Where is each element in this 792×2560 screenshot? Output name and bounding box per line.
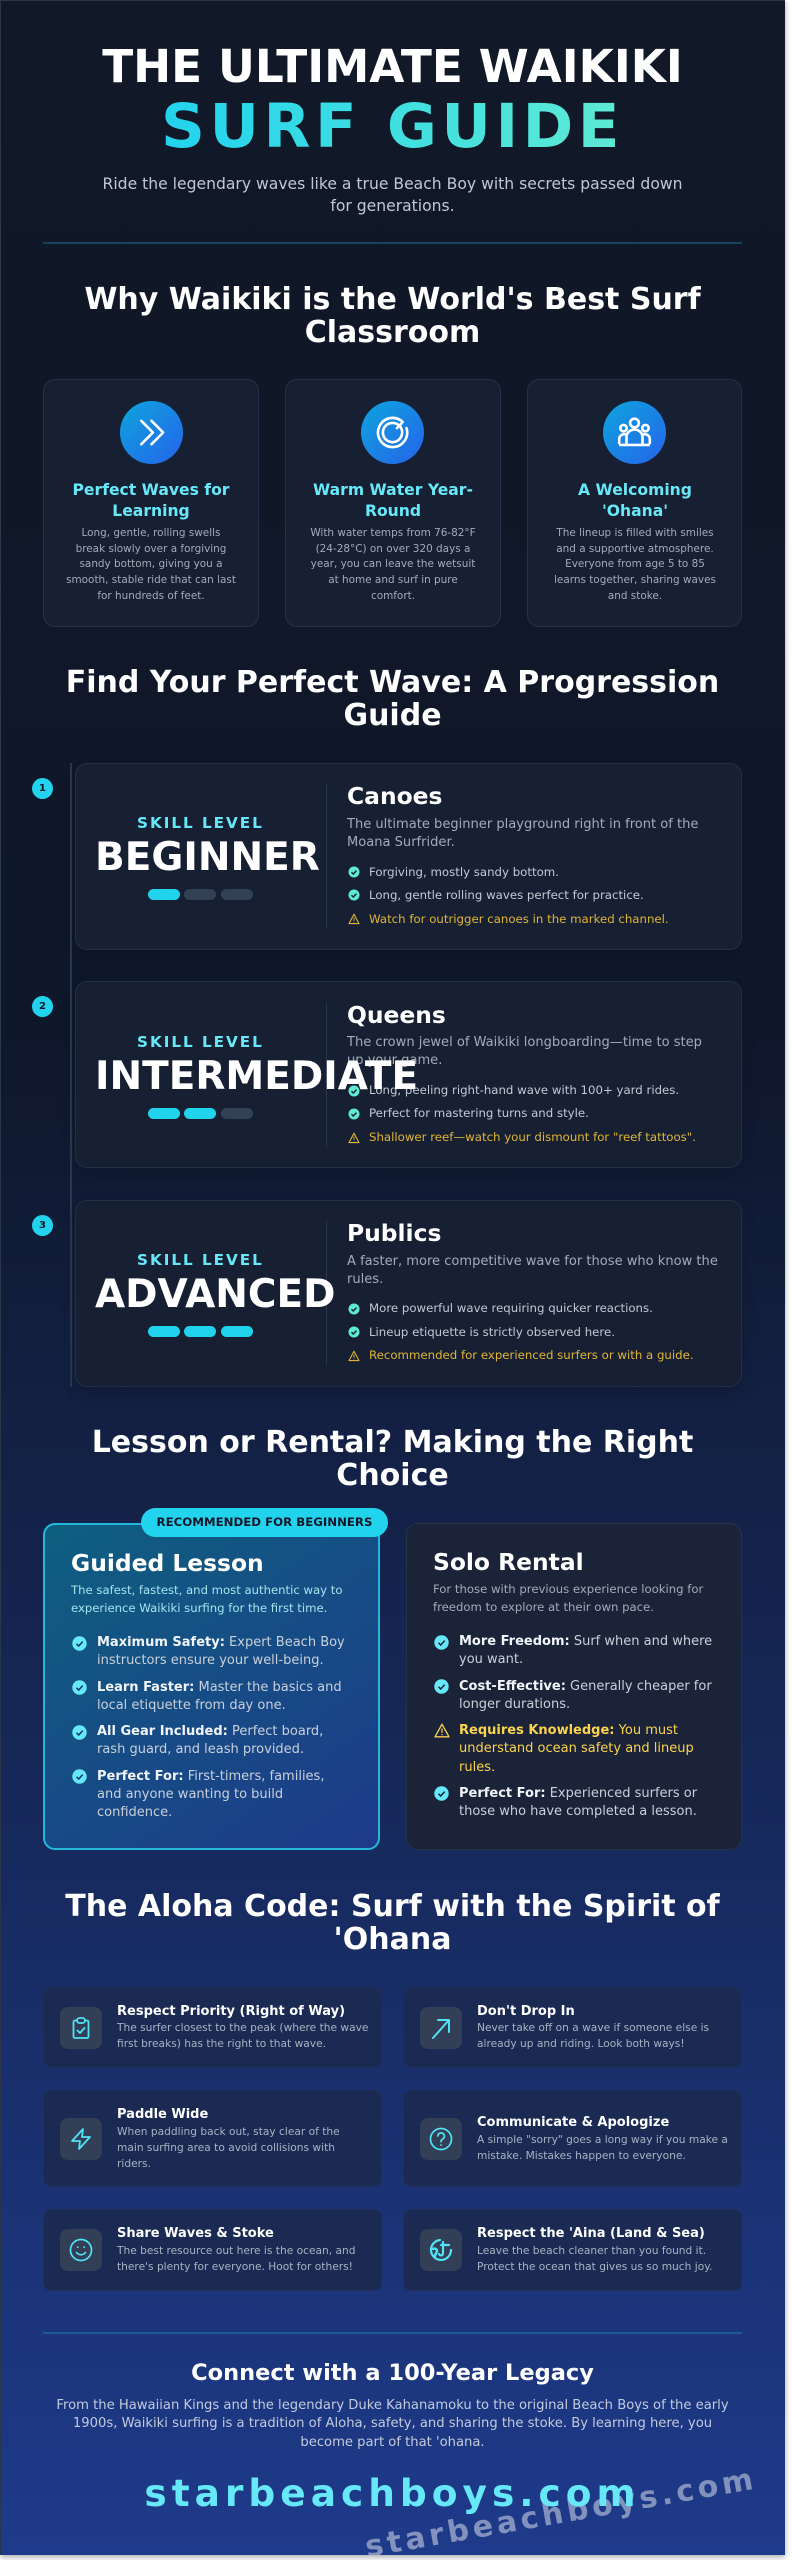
level meter — [148, 1326, 253, 1337]
panel text: solo rental: For those with previous experience looking for — [433, 1582, 703, 1596]
icon: question — [420, 2118, 462, 2160]
spot name: Queens — [347, 1001, 446, 1029]
check icon — [434, 1635, 449, 1650]
warning: Shallower reef—watch your dismount for "reef tattoos". — [369, 1130, 696, 1144]
rule text: Leave the beach cleaner than you found it. — [477, 2244, 706, 2257]
check icon — [348, 1326, 360, 1338]
card heading: ohana: 'Ohana' — [602, 502, 668, 520]
heading: legacy: Connect with a 100-Year Legacy — [191, 2360, 594, 2386]
skill label: SKILL LEVEL — [137, 814, 264, 832]
benefit: Perfect For: First-timers, families, — [97, 1768, 324, 1784]
level meter — [148, 1108, 253, 1119]
card text: perfect waves — [66, 527, 236, 602]
rule text: there's plenty for everyone. Hoot for others! — [117, 2260, 353, 2273]
benefit: rash guard, and leash provided. — [97, 1742, 304, 1757]
panel: ohana — [527, 379, 742, 627]
rule title: Communicate & Apologize — [477, 2115, 669, 2130]
timeline number 1: 1 — [39, 783, 46, 794]
rule text: first breaks) has the right to that wave. — [117, 2037, 326, 2050]
benefit: Maximum Safety: Expert Beach Boy — [97, 1635, 345, 1650]
point: Forgiving, mostly sandy bottom. — [369, 865, 559, 879]
icon: ohana — [603, 401, 666, 464]
panel: beginner — [75, 763, 742, 950]
con: understand ocean safety and lineup — [459, 1741, 694, 1756]
check icon — [348, 1304, 360, 1314]
spot name: Canoes — [347, 782, 442, 810]
level meter — [148, 889, 253, 900]
rule: share waves — [43, 2209, 382, 2291]
footer text: 1900s, Waikiki surfing is a tradition of Aloha, safety, and sharing the stoke. By learning here, you — [73, 2416, 712, 2431]
panel text: guided lesson: experience Waikiki surfing for the first time. — [71, 1601, 327, 1615]
pro: Cost-Effective: Generally cheaper for — [459, 1678, 712, 1694]
warning: Recommended for experienced surfers or with a guide. — [369, 1348, 694, 1362]
rule text: main surfing area to avoid collisions with — [117, 2141, 335, 2154]
benefit: Learn Faster: Master the basics and — [97, 1680, 342, 1694]
heading: why waikiki — [84, 282, 701, 350]
heading: find your wave: Guide — [343, 698, 442, 732]
point: More powerful wave requiring quicker reactions. — [369, 1301, 653, 1315]
check icon — [434, 1786, 449, 1801]
card text: ohana — [554, 527, 716, 602]
card text: perfect waves: Long, gentle, rolling swells — [82, 527, 220, 539]
spot description: rules. — [347, 1272, 383, 1287]
benefit — [97, 1724, 323, 1757]
spot description: The ultimate beginner playground right in front of the — [347, 817, 698, 832]
panel text: solo rental — [433, 1582, 704, 1614]
card heading: ohana — [578, 481, 692, 520]
check icon — [72, 1769, 87, 1784]
spot description: Moana Surfrider. — [347, 835, 455, 850]
benefit: local etiquette from day one. — [97, 1698, 286, 1713]
timeline number 3 — [32, 1215, 53, 1236]
card heading: perfect waves — [72, 481, 230, 520]
heading: aloha code: 'Ohana — [334, 1922, 451, 1956]
card text: warm water — [310, 527, 476, 602]
check icon — [348, 866, 360, 878]
card heading: ohana: A Welcoming — [578, 481, 692, 499]
rule text: A simple "sorry" goes a long way if you make a — [477, 2133, 728, 2146]
heading: aloha code: The Aloha Code: Surf with the Spirit of — [65, 1889, 720, 1924]
icon: bolt — [60, 2118, 102, 2160]
card text: warm water: With water temps from 76-82°F — [310, 527, 476, 539]
rule title: Respect Priority (Right of Way) — [117, 2004, 345, 2019]
intro text — [102, 175, 682, 214]
card heading: perfect waves: Learning — [112, 502, 190, 520]
rule text: The best resource out here is the ocean, and — [117, 2244, 355, 2257]
check icon — [348, 1086, 360, 1096]
intro text: for generations. — [330, 196, 455, 214]
rule text — [477, 2020, 709, 2052]
point: Lineup etiquette is strictly observed here. — [369, 1325, 615, 1339]
panel: solo rental — [406, 1523, 742, 1850]
panel text: guided lesson: The safest, fastest, and most authentic way to — [71, 1583, 342, 1597]
card text: ohana: Everyone from age 5 to 85 — [565, 558, 705, 570]
panel: perfect waves — [43, 379, 259, 627]
timeline number 1 — [32, 778, 53, 799]
pro: longer durations. — [459, 1697, 570, 1712]
timeline number 2: 2 — [39, 1001, 46, 1012]
icon: warm water — [361, 401, 424, 464]
panel: warm water — [285, 379, 501, 627]
icon: clipboard — [60, 2007, 102, 2049]
rule: paddle wide — [43, 2090, 382, 2187]
rule: communicate — [403, 2090, 742, 2187]
warning: Watch for outrigger canoes in the marked channel. — [369, 912, 669, 926]
rule: don't drop in — [403, 1987, 742, 2068]
rule text: The surfer closest to the peak (where the wave — [117, 2021, 368, 2034]
rule text: When paddling back out, stay clear of the — [117, 2125, 340, 2138]
rule text — [117, 2020, 368, 2052]
check icon — [72, 1636, 87, 1651]
point: Perfect for mastering turns and style. — [369, 1106, 589, 1120]
con — [459, 1722, 694, 1777]
pro — [459, 1785, 697, 1822]
spot name: Publics — [347, 1219, 441, 1247]
card text: warm water: (24-28°C) on over 320 days a — [316, 543, 470, 555]
icon: smile — [60, 2229, 102, 2271]
panel: advanced — [75, 1200, 742, 1387]
panel heading: guided lesson: Guided Lesson — [71, 1549, 264, 1577]
title: THE ULTIMATE WAIKIKI — [102, 40, 683, 93]
spot description — [346, 817, 698, 850]
rule text: riders. — [117, 2157, 151, 2170]
spot description — [347, 1254, 718, 1287]
benefit: All Gear Included: Perfect board, — [97, 1724, 323, 1739]
warning icon — [348, 1350, 360, 1362]
rule text — [477, 2132, 728, 2164]
benefit — [97, 1680, 342, 1713]
intro text: Ride the legendary waves like a true Beach Boy with secrets passed down — [102, 175, 682, 193]
pro — [459, 1678, 712, 1714]
card heading: warm water: Round — [365, 502, 421, 520]
card text: ohana: and a supportive atmosphere. — [556, 543, 714, 555]
rule: respect priority — [43, 1987, 382, 2068]
heading: lesson or rental: Lesson or Rental? Making the Right — [92, 1425, 693, 1460]
footer text: From the Hawaiian Kings and the legendary Duke Kahanamoku to the original Beach Boys of the early — [56, 2398, 729, 2413]
panel text: solo rental: freedom to explore at their own pace. — [433, 1600, 654, 1614]
heading: find your wave: Find Your Perfect Wave: A Progression — [66, 665, 719, 700]
level name: BEGINNER — [95, 835, 320, 880]
rule text — [477, 2243, 712, 2275]
panel: guided lesson — [43, 1523, 380, 1850]
heading: why waikiki: Classroom — [305, 314, 480, 350]
footer text: become part of that 'ohana. — [300, 2435, 485, 2450]
benefit: confidence. — [97, 1805, 172, 1820]
rule: respect the aina — [403, 2209, 742, 2291]
card heading: warm water — [313, 481, 473, 520]
card text: perfect waves: break slowly over a forgiving — [76, 543, 226, 555]
card text: warm water: at home and surf in pure — [328, 574, 458, 586]
card text: ohana: The lineup is filled with smiles — [556, 527, 714, 539]
panel: intermediate — [75, 981, 742, 1168]
list: solo rental — [434, 1634, 712, 1819]
pro: those who have completed a lesson. — [459, 1804, 697, 1819]
warning icon — [434, 1723, 450, 1738]
skill label: SKILL LEVEL — [137, 1033, 264, 1051]
icon: arrow — [420, 2007, 462, 2049]
rule text — [117, 2243, 355, 2275]
footer text — [0, 2397, 785, 2452]
rule text: mistake. Mistakes happen to everyone. — [477, 2149, 686, 2162]
badge: recommended — [141, 1508, 388, 1537]
rule title: Share Waves & Stoke — [117, 2226, 274, 2241]
card text: perfect waves: sandy bottom, giving you a — [79, 558, 222, 570]
check icon — [72, 1680, 87, 1695]
icon: globe — [420, 2229, 462, 2271]
icon: perfect waves — [120, 401, 183, 464]
benefit: and anyone wanting to build — [97, 1787, 283, 1802]
point: Long, gentle rolling waves perfect for practice. — [369, 888, 644, 902]
rule title: Paddle Wide — [117, 2107, 208, 2122]
spot description: The crown jewel of Waikiki longboarding—time to step — [347, 1035, 702, 1050]
warning icon — [348, 914, 360, 924]
pro: More Freedom: Surf when and where — [459, 1634, 712, 1649]
heading: lesson or rental: Choice — [336, 1458, 449, 1492]
rule text: Never take off on a wave if someone else is — [477, 2021, 709, 2034]
heading: lesson or rental — [92, 1425, 693, 1492]
rule text — [117, 2124, 340, 2171]
spot description — [346, 1035, 702, 1068]
check icon — [348, 890, 360, 900]
level name: ADVANCED — [95, 1272, 336, 1317]
pro: you want. — [459, 1652, 523, 1667]
pro — [459, 1634, 712, 1667]
timeline number 2 — [32, 996, 53, 1017]
rule title: Respect the 'Aina (Land & Sea) — [477, 2226, 705, 2241]
spot description: A faster, more competitive wave for those who know the — [347, 1254, 718, 1269]
card heading: warm water: Warm Water Year- — [313, 481, 473, 499]
card text: ohana: and stoke. — [608, 590, 662, 602]
card text: perfect waves: for hundreds of feet. — [97, 590, 205, 602]
pro: Perfect For: Experienced surfers or — [459, 1786, 697, 1801]
card text: perfect waves: smooth, stable ride that can last — [66, 574, 236, 586]
badge: recommended: RECOMMENDED FOR BEGINNERS — [157, 1515, 372, 1529]
rule text: Protect the ocean that gives us so much joy. — [477, 2260, 712, 2273]
card text: warm water: comfort. — [371, 590, 415, 602]
check icon — [72, 1725, 87, 1740]
panel text: guided lesson — [70, 1583, 342, 1615]
list: guided lesson — [72, 1635, 345, 1820]
rule text: already up and riding. Look both ways! — [477, 2037, 685, 2050]
rule title: Don't Drop In — [477, 2004, 575, 2019]
panel heading: solo rental: Solo Rental — [433, 1548, 584, 1576]
card text: warm water: year, you can leave the wetsuit — [311, 558, 475, 570]
card text: ohana: learns together, sharing waves — [554, 574, 716, 586]
subtitle: surf guide: SURF GUIDE — [161, 90, 624, 162]
skill label: SKILL LEVEL — [137, 1251, 264, 1269]
con: Requires Knowledge: You must — [459, 1723, 678, 1738]
benefit — [97, 1768, 324, 1820]
benefit — [97, 1635, 345, 1668]
check icon — [434, 1679, 449, 1694]
con: rules. — [459, 1760, 495, 1775]
spot description: up your game. — [347, 1053, 442, 1068]
benefit: instructors ensure your well-being. — [97, 1653, 324, 1668]
heading: find your wave — [66, 665, 719, 732]
card heading: perfect waves: Perfect Waves for — [72, 481, 230, 499]
level name: INTERMEDIATE — [95, 1054, 418, 1099]
website link: starbeachboys.com — [144, 2471, 641, 2515]
timeline number 3: 3 — [39, 1220, 46, 1231]
point: Long, peeling right-hand wave with 100+ yard rides. — [369, 1083, 679, 1097]
check icon — [348, 1108, 360, 1120]
heading: why waikiki: Why Waikiki is the World's Best Surf — [84, 282, 701, 317]
warning icon — [348, 1132, 360, 1144]
heading: aloha code — [0, 1891, 785, 1956]
